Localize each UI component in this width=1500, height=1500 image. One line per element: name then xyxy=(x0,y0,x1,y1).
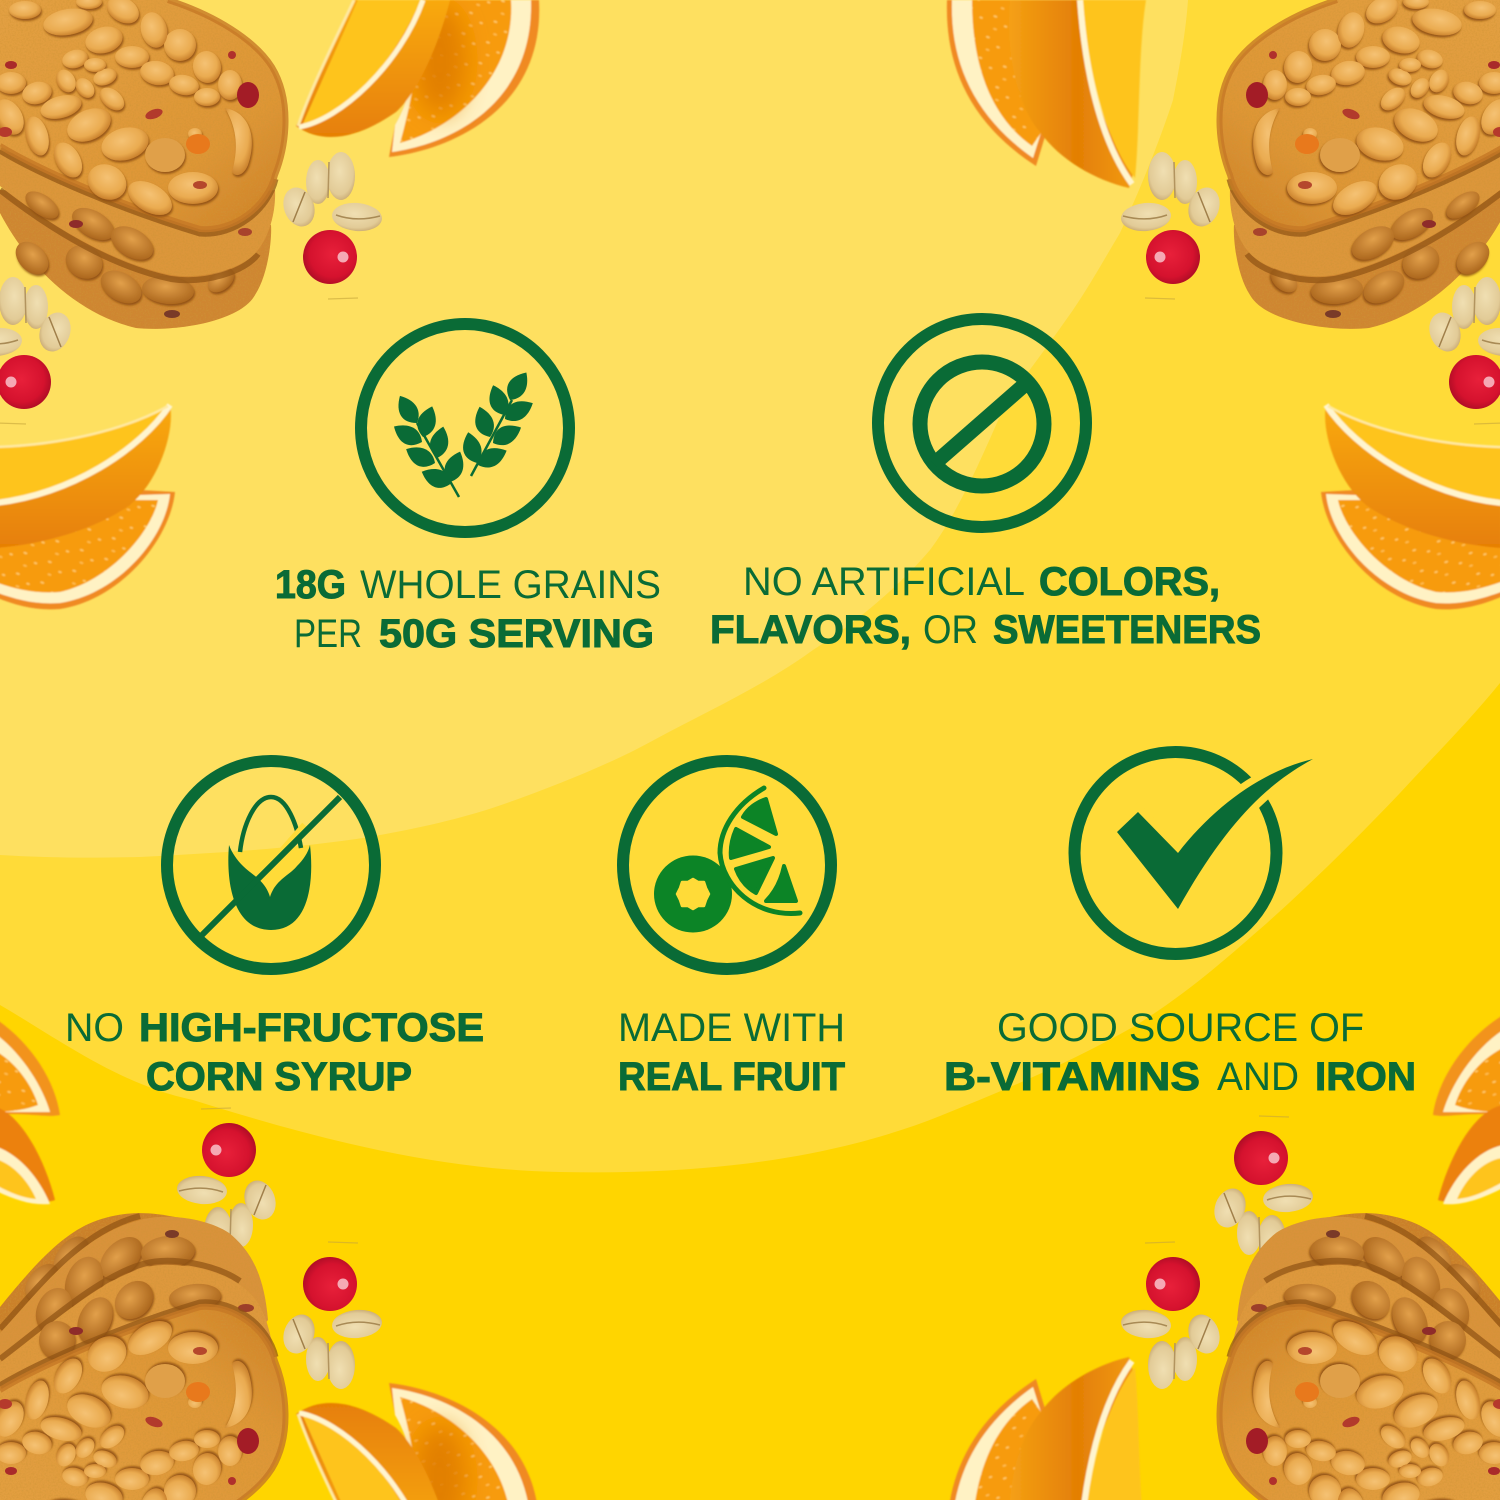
icon: crossed-out corn xyxy=(167,761,375,969)
text: no artificial colors xyxy=(710,560,1261,652)
orange slices mid left xyxy=(0,405,175,609)
orange slices top left xyxy=(296,0,539,157)
cranberry and oats right edge xyxy=(1424,277,1500,424)
icon: kiwi and citrus slice xyxy=(623,761,831,969)
text: no artificial colors: COLORS, xyxy=(1039,560,1220,604)
cranberry and oats top right xyxy=(1120,152,1225,299)
cranberry and oats bottom right lower xyxy=(1120,1242,1225,1389)
icon: check mark in circle xyxy=(1074,752,1313,954)
text: b-vitamins and iron: B-VITAMINS xyxy=(944,1055,1200,1099)
orange slices bottom left xyxy=(296,1383,539,1500)
orange slices bottom left edge xyxy=(0,1015,60,1204)
text: b-vitamins and iron: IRON xyxy=(1315,1055,1416,1099)
orange slices bottom right edge xyxy=(1433,1015,1500,1204)
orange slices bottom right xyxy=(947,1357,1146,1500)
text: made with real fruit: MADE WITH xyxy=(618,1006,845,1050)
text: whole grains: 18G xyxy=(275,563,346,607)
text: whole grains: PER xyxy=(294,612,362,656)
cranberry and oats left edge xyxy=(0,277,76,424)
text: no artificial colors: NO ARTIFICIAL xyxy=(743,560,1025,604)
cranberry and oats top left xyxy=(278,152,383,299)
cranberry and oats bottom right upper xyxy=(1209,1116,1314,1263)
cookie stack bottom right xyxy=(1219,1213,1500,1500)
text: no high-fructose corn syrup xyxy=(65,1006,484,1099)
text: no artificial colors: FLAVORS, xyxy=(710,608,911,652)
text: no high-fructose corn syrup: HIGH-FRUCTOSE xyxy=(139,1006,484,1050)
text: b-vitamins and iron: GOOD SOURCE OF xyxy=(997,1006,1364,1050)
text: b-vitamins and iron xyxy=(944,1006,1416,1099)
text: made with real fruit: REAL FRUIT xyxy=(618,1055,845,1099)
icon: prohibited sign xyxy=(878,319,1086,527)
orange slices top right xyxy=(947,0,1146,188)
text: no high-fructose corn syrup: CORN SYRUP xyxy=(146,1055,412,1099)
text: no high-fructose corn syrup: NO xyxy=(65,1006,124,1050)
cookie stack bottom left xyxy=(0,1213,286,1500)
text: made with real fruit xyxy=(618,1006,845,1099)
text: whole grains: 50G SERVING xyxy=(379,612,654,656)
orange slices mid right xyxy=(1321,405,1500,609)
cookie stack top left xyxy=(0,0,286,329)
text: no artificial colors: SWEETENERS xyxy=(993,608,1261,652)
text: b-vitamins and iron: AND xyxy=(1217,1055,1299,1099)
cranberry and oats bottom left lower xyxy=(278,1242,383,1389)
icon: wheat grains xyxy=(361,324,569,532)
cranberry and oats bottom left upper xyxy=(176,1108,281,1255)
cookie stack top right xyxy=(1219,0,1500,329)
text: whole grains xyxy=(275,563,661,656)
text: whole grains: WHOLE GRAINS xyxy=(360,563,661,607)
text: no artificial colors: OR xyxy=(923,608,978,652)
